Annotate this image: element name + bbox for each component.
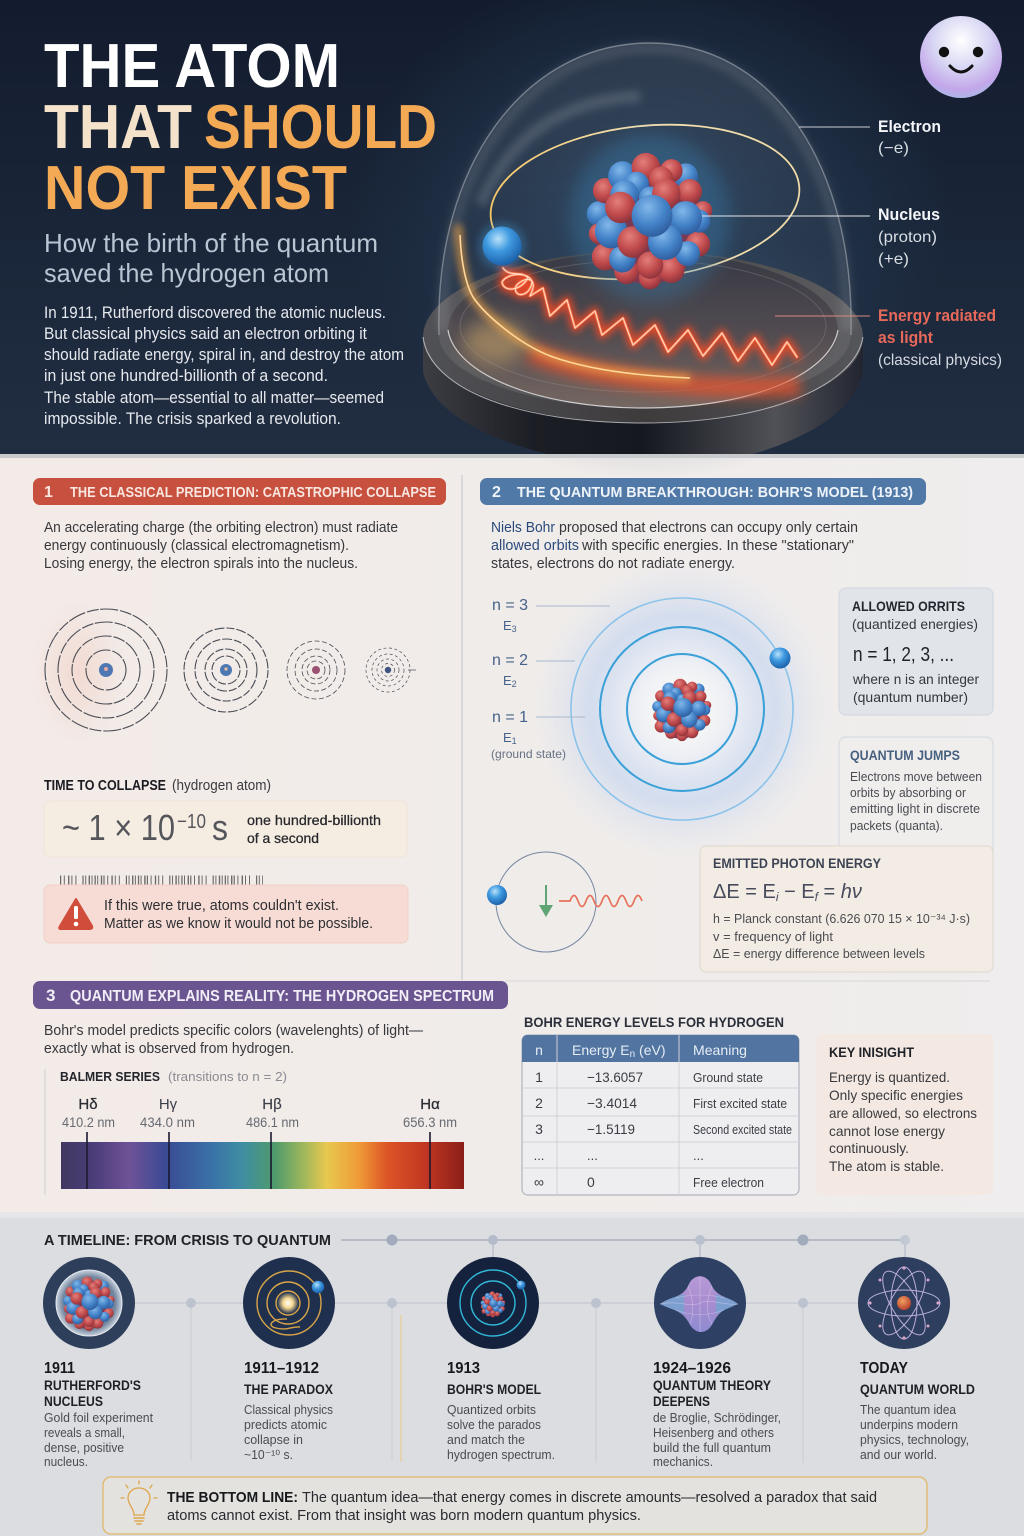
milestone: 1913: BOHR'S MODEL <box>447 1382 541 1397</box>
classical orbit <box>483 110 807 294</box>
label: nucleus: (+e) <box>878 251 909 268</box>
section 2 description: states, electrons do not radiate energy. <box>491 556 735 572</box>
milestone: today: The quantum idea <box>860 1403 956 1417</box>
table row n=2: −3.4014 <box>587 1095 637 1111</box>
time to collapse heading <box>44 778 271 794</box>
table row n=3 <box>535 1121 792 1137</box>
card: quantum jumps: Electrons move between <box>850 770 982 784</box>
section 2 heading badge: 2 <box>492 484 501 501</box>
timeline heading: A TIMELINE: FROM CRISIS TO QUANTUM <box>44 1232 331 1249</box>
illustration: glass dome atom <box>423 43 863 454</box>
title: THAT <box>44 93 192 162</box>
table header row: (eV) <box>635 1042 666 1058</box>
section 2 description: with specific energies. In these "stationary" <box>581 538 854 554</box>
small electron <box>487 885 507 905</box>
table row infinity: ∞ <box>534 1174 544 1190</box>
orbit labels <box>491 597 610 761</box>
table row infinity <box>534 1174 764 1190</box>
section 3 heading badge: 3 <box>46 986 55 1005</box>
subtitle: saved the hydrogen atom <box>44 258 329 288</box>
arrow: downward jump <box>539 885 553 917</box>
callout: warning: Matter as we know it would not be possible. <box>104 916 373 932</box>
label: nucleus: (proton) <box>878 229 937 246</box>
card: allowed orbits: ALLOWED ORRITS <box>852 598 965 614</box>
line: H beta: Hβ <box>262 1096 282 1113</box>
card: key insight: cannot lose energy <box>829 1123 945 1139</box>
icon: the paradox spiral <box>243 1257 335 1349</box>
label: electron: (−e) <box>878 140 909 157</box>
milestone: 1913: 1913 <box>447 1360 480 1377</box>
callout: warning <box>44 885 408 943</box>
atom stage 3 <box>287 641 345 699</box>
chart: Balmer series spectrum <box>45 1069 464 1195</box>
intro paragraph: impossible. The crisis sparked a revolution. <box>44 410 341 428</box>
milestone: 1924-1926 <box>653 1360 781 1469</box>
orbit labels: n = 2 <box>492 652 528 669</box>
title: SHOULD <box>204 93 437 162</box>
milestone: 1924-1926: mechanics. <box>653 1455 713 1469</box>
card: key insight: continuously. <box>829 1140 909 1156</box>
milestone: 1913: Quantized orbits <box>447 1403 536 1417</box>
radiated wave <box>502 268 797 365</box>
milestone: 1913: solve the parados <box>447 1418 541 1432</box>
section 3 description <box>44 1023 423 1057</box>
display base <box>423 251 863 454</box>
section 1 description: Losing energy, the electron spirals into the nucleus. <box>44 556 358 572</box>
intro paragraph <box>44 304 404 428</box>
card: emitted photon energy: h = Planck constant (6.626 070 15 × 10⁻³⁴ J·s) <box>713 912 970 926</box>
atom stage 2 <box>184 628 268 712</box>
mascot: smiling atom <box>920 16 1002 98</box>
section 1 description: An accelerating charge (the orbiting electron) must radiate <box>44 520 398 536</box>
milestone: 1911-1912: predicts atomic <box>244 1418 327 1432</box>
table row n=1 <box>535 1069 763 1085</box>
line: H gamma: 434.0 nm <box>140 1115 195 1130</box>
timeline connectors <box>135 1234 910 1463</box>
table header row <box>535 1042 747 1060</box>
callout: the bottom line: The quantum idea—that energy comes in discrete amounts—resolved a paradox that said <box>302 1489 877 1506</box>
card: quantum jumps <box>839 737 993 867</box>
card: key insight: are allowed, so electrons <box>829 1105 977 1121</box>
Bohr electron <box>770 648 790 668</box>
line: H delta: Hδ <box>78 1096 98 1113</box>
milestone: 1911: reveals a small, <box>44 1426 125 1440</box>
card: allowed orbits: (quantum number) <box>853 689 968 705</box>
milestone: 1911: NUCLEUS <box>44 1394 103 1409</box>
milestone: 1911: nucleus. <box>44 1455 88 1469</box>
orbit labels: E <box>503 730 512 745</box>
icon: Rutherford nucleus <box>43 1257 135 1349</box>
card: emitted photon energy: v = frequency of light <box>713 930 834 944</box>
milestone: 1924-1926: de Broglie, Schrödinger, <box>653 1411 781 1425</box>
table row n=1: −13.6057 <box>587 1069 643 1085</box>
section 2 heading badge <box>480 478 926 505</box>
title <box>44 32 437 223</box>
table: Bohr energy levels: BOHR ENERGY LEVELS FOR HYDROGEN <box>524 1014 784 1030</box>
card: emitted photon energy: f <box>815 890 820 904</box>
table header row: Energy E <box>572 1042 630 1058</box>
card: key insight: Only specific energies <box>829 1087 963 1103</box>
milestone: 1911-1912: Classical physics <box>244 1403 333 1417</box>
chart: Balmer series spectrum: BALMER SERIES <box>60 1069 160 1084</box>
table row n=2: 2 <box>535 1095 543 1111</box>
section 2 description: proposed that electrons can occupy only certain <box>559 520 858 536</box>
section 1 description: energy continuously (classical electromagnetism). <box>44 538 349 554</box>
card: allowed orbits: where n is an integer <box>852 671 979 687</box>
callout: the bottom line: THE BOTTOM LINE: <box>167 1489 298 1506</box>
milestone: 1913: and match the <box>447 1433 525 1447</box>
milestone: 1911-1912: ~10⁻¹⁰ s. <box>244 1448 293 1462</box>
card: emitted photon energy: EMITTED PHOTON ENERGY <box>713 856 881 871</box>
label: nucleus <box>702 205 940 268</box>
milestone: 1911-1912: 1911–1912 <box>244 1360 319 1377</box>
table row infinity: Free electron <box>693 1175 764 1190</box>
subtitle <box>44 228 378 288</box>
line: H delta <box>62 1096 115 1189</box>
milestone: 1911 <box>44 1360 154 1469</box>
label: nucleus: Nucleus <box>878 205 940 224</box>
card: emitted photon energy: i <box>776 890 779 904</box>
orbit labels: n = 1 <box>492 709 528 726</box>
milestone: today: QUANTUM WORLD <box>860 1382 975 1397</box>
title: THE ATOM <box>44 32 340 101</box>
icon: Bohr model orbits <box>447 1257 539 1349</box>
table row n=3: 3 <box>535 1121 543 1137</box>
glass dome <box>439 43 851 408</box>
callout: the bottom line: atoms cannot exist. From that insight was born modern quantum physics. <box>167 1507 641 1524</box>
milestone: 1911: 1911 <box>44 1360 75 1377</box>
milestone: 1913: hydrogen spectrum. <box>447 1448 555 1462</box>
panel: hero header <box>0 0 1024 480</box>
milestone: 1924-1926: DEEPENS <box>653 1394 710 1409</box>
table row n=3: −1.5119 <box>587 1121 635 1137</box>
milestone: 1924-1926: QUANTUM THEORY <box>653 1378 771 1393</box>
intro paragraph: should radiate energy, spiral in, and destroy the atom <box>44 346 404 364</box>
section 3 description: exactly what is observed from hydrogen. <box>44 1041 294 1057</box>
table row n=1: Ground state <box>693 1070 763 1085</box>
card: key insight: The atom is stable. <box>829 1158 944 1174</box>
panel: section 2 quantum breakthrough <box>480 478 993 972</box>
icon: quantum world atom <box>858 1257 950 1349</box>
panel: timeline <box>0 1212 1024 1536</box>
table row ellipsis: ... <box>587 1148 598 1163</box>
card: allowed orbits: n = 1, 2, 3, ... <box>853 644 954 666</box>
line: H beta <box>246 1096 299 1189</box>
section 2 description <box>491 520 858 572</box>
intro paragraph: The stable atom—essential to all matter—seemed <box>44 389 384 407</box>
intro paragraph: in just one hundred-billionth of a second. <box>44 367 328 385</box>
icon: warning triangle <box>59 899 92 929</box>
orange swoosh and floor glow <box>458 225 800 387</box>
diagram: Bohr atom <box>532 559 832 859</box>
divider lines <box>462 475 990 981</box>
milestone: 1924-1926: build the full quantum <box>653 1441 771 1455</box>
atom stage 4 <box>366 648 416 692</box>
panel: section 1 classical prediction <box>30 478 446 943</box>
card: key insight: Energy is quantized. <box>829 1069 950 1085</box>
section 3 description: Bohr's model predicts specific colors (wavelenghts) of light— <box>44 1023 423 1039</box>
milestone: today: TODAY <box>860 1360 908 1377</box>
hero nucleus <box>570 134 730 302</box>
card: key insight <box>816 1034 993 1195</box>
hero electron <box>478 222 526 270</box>
callout: collapse time value: −10 <box>177 811 206 833</box>
time to collapse heading: TIME TO COLLAPSE <box>44 778 166 794</box>
milestone: 1911: dense, positive <box>44 1441 124 1455</box>
table: Bohr energy levels <box>522 1014 799 1195</box>
table row infinity: 0 <box>587 1174 595 1190</box>
card: key insight: KEY INISIGHT <box>829 1044 914 1060</box>
orbit labels: n = 3 <box>492 597 528 614</box>
icon: wave function <box>654 1257 746 1349</box>
milestone: today: underpins modern <box>860 1418 958 1432</box>
atom stage 1 <box>45 609 167 731</box>
section 1 heading badge <box>33 478 446 505</box>
title: NOT EXIST <box>44 154 347 223</box>
garbled marks above warning <box>60 876 263 884</box>
section 2 heading badge: THE QUANTUM BREAKTHROUGH: BOHR'S MODEL (1913) <box>517 484 913 501</box>
card: allowed orbits: (quantized energies) <box>852 616 978 632</box>
card: emitted photon energy: ΔE = energy difference between levels <box>713 947 925 961</box>
table row n=1: 1 <box>535 1069 543 1085</box>
orbit labels: E <box>503 618 512 633</box>
chart: Balmer series spectrum: (transitions to n = 2) <box>168 1069 287 1084</box>
time to collapse heading: (hydrogen atom) <box>172 778 271 794</box>
callout: warning: If this were true, atoms couldn't exist. <box>104 898 339 914</box>
diagram: shrinking orbits <box>30 600 416 744</box>
card: quantum jumps: QUANTUM JUMPS <box>850 748 960 763</box>
milestone: 1924-1926: 1924–1926 <box>653 1360 731 1377</box>
card: emitted photon energy: − E <box>779 881 815 903</box>
intro paragraph: But classical physics said an electron orbiting it <box>44 325 367 343</box>
milestone: today: physics, technology, <box>860 1433 969 1447</box>
milestone: today: and our world. <box>860 1448 937 1462</box>
card: allowed orbits <box>839 588 993 715</box>
label: energy radiated: (classical physics) <box>878 352 1002 369</box>
orbit labels: (ground state) <box>491 747 566 761</box>
milestone: 1911-1912: THE PARADOX <box>244 1382 333 1397</box>
callout: the bottom line <box>103 1477 927 1534</box>
milestone: today <box>860 1360 975 1462</box>
section 3 heading badge: QUANTUM EXPLAINS REALITY: THE HYDROGEN SPECTRUM <box>70 988 494 1005</box>
orbit labels: E <box>503 673 512 688</box>
callout: collapse time value <box>44 801 407 857</box>
label: electron: Electron <box>878 117 941 136</box>
card: quantum jumps: emitting light in discrete <box>850 802 980 816</box>
label: energy radiated <box>775 306 1002 369</box>
section 1 heading badge: THE CLASSICAL PREDICTION: CATASTROPHIC COLLAPSE <box>70 484 436 501</box>
milestone: 1913 <box>447 1360 555 1462</box>
card: emitted photon energy <box>700 846 993 972</box>
table row n=3: Second excited state <box>693 1122 792 1137</box>
section 1 description <box>44 520 398 572</box>
table row ellipsis: ... <box>693 1148 704 1163</box>
orbit labels: 2 <box>512 679 517 689</box>
line: H gamma <box>140 1096 195 1189</box>
callout: collapse time value: ~ 1 × 10 <box>62 807 175 848</box>
panel: section 3 hydrogen spectrum <box>33 981 993 1195</box>
label: energy radiated: Energy radiated <box>878 306 996 325</box>
line: H alpha: 656.3 nm <box>403 1115 457 1130</box>
callout: collapse time value: one hundred-billionth <box>247 812 381 828</box>
card: quantum jumps: packets (quanta). <box>850 819 943 833</box>
section 2 description: Niels Bohr <box>491 520 555 536</box>
orbit labels: 3 <box>512 624 517 634</box>
card: emitted photon energy: hν <box>841 881 862 903</box>
line: H beta: 486.1 nm <box>246 1115 299 1130</box>
milestone: 1924-1926: Heisenberg and others <box>653 1426 774 1440</box>
card: quantum jumps: orbits by absorbing or <box>850 786 966 800</box>
label: electron <box>799 117 941 157</box>
table row ellipsis <box>534 1148 704 1163</box>
intro paragraph: In 1911, Rutherford discovered the atomic nucleus. <box>44 304 386 322</box>
subtitle: How the birth of the quantum <box>44 228 378 258</box>
section 2 description: allowed orbits <box>491 538 579 554</box>
milestone: 1911: RUTHERFORD'S <box>44 1378 141 1393</box>
table header row: Meaning <box>693 1042 747 1058</box>
label: energy radiated: as light <box>878 328 933 347</box>
line: H alpha: Hα <box>420 1096 440 1113</box>
callout: collapse time value: s <box>212 807 228 848</box>
diagram: electron jump with photon <box>487 852 642 952</box>
line: H alpha <box>403 1096 457 1189</box>
table header row: n <box>630 1049 635 1060</box>
milestone: 1911-1912 <box>244 1360 333 1462</box>
card: emitted photon energy: = <box>818 881 841 903</box>
milestone: 1911-1912: collapse in <box>244 1433 303 1447</box>
table row ellipsis: ... <box>534 1148 544 1163</box>
card: emitted photon energy: ΔE = E <box>713 881 776 903</box>
table header row: n <box>535 1042 543 1058</box>
line: H delta: 410.2 nm <box>62 1115 115 1130</box>
table row n=2: First excited state <box>693 1096 787 1111</box>
line: H gamma: Hγ <box>159 1096 178 1113</box>
emitted photon wave <box>559 896 642 906</box>
milestone: 1911: Gold foil experiment <box>44 1411 154 1425</box>
section 3 heading badge <box>33 981 508 1009</box>
callout: collapse time value: of a second <box>247 830 319 846</box>
Bohr nucleus <box>652 679 711 741</box>
orbit labels: 1 <box>512 736 517 746</box>
icon: light bulb <box>121 1481 157 1524</box>
table row n=2 <box>535 1095 787 1111</box>
section 1 heading badge: 1 <box>44 484 53 501</box>
